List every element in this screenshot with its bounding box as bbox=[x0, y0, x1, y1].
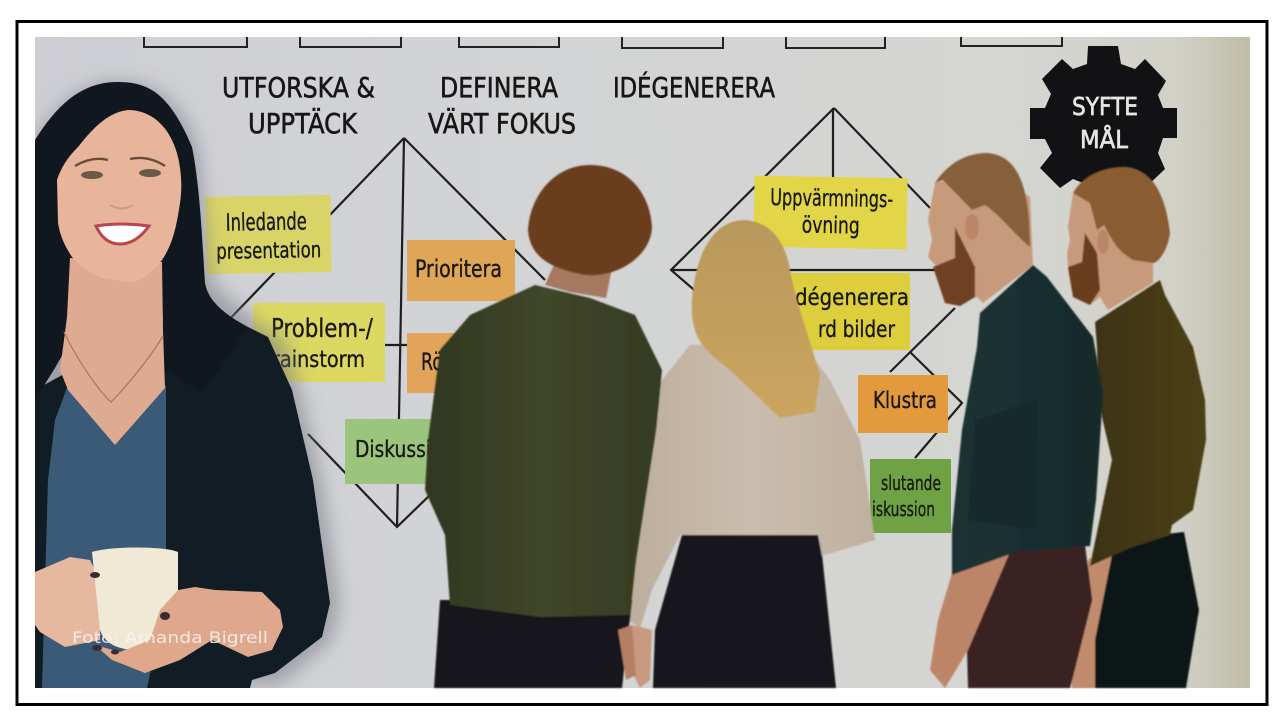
smile bbox=[96, 224, 149, 244]
portrait shadow bbox=[35, 82, 340, 685]
person: woman with blonde hair and beige sweater bbox=[628, 220, 875, 688]
top empty boxes bbox=[144, 37, 1062, 48]
blazer bbox=[35, 320, 330, 688]
eyes and brows bbox=[75, 158, 165, 179]
nose shading bbox=[110, 205, 133, 208]
sticky note: prioritera bbox=[407, 240, 515, 301]
face bbox=[57, 110, 181, 282]
icon: gear syfte mål: SYFTE bbox=[1072, 92, 1138, 121]
icon: gear syfte mål: MÅL bbox=[1080, 125, 1128, 154]
heading: definera vårt fokus: DEFINERA bbox=[440, 71, 558, 104]
sticky note: klustra: Klustra bbox=[873, 388, 937, 414]
neck and chest bbox=[60, 258, 165, 445]
sticky note: inledande presentation: Inledande bbox=[226, 207, 307, 237]
necklace bbox=[64, 332, 163, 402]
sticky note: idégenerera med bilder: dégenerera bbox=[795, 285, 909, 311]
sticky note: uppvärmningsövning bbox=[753, 176, 908, 249]
sticky note: uppvärmningsövning: Uppvärmnings- bbox=[770, 185, 893, 213]
hair bbox=[35, 82, 248, 400]
sticky note: uppvärmningsövning: övning bbox=[802, 213, 860, 240]
sticky note: klustra bbox=[858, 375, 948, 433]
right diamond diagram bbox=[671, 108, 962, 458]
right hand and forearm bbox=[95, 587, 283, 673]
sticky note: diskussion bbox=[345, 419, 435, 484]
sticky note: idégenerera med bilder bbox=[788, 273, 910, 350]
sticky note: avslutande diskussion bbox=[870, 459, 951, 533]
sticky note: problem brainstorm bbox=[253, 303, 385, 382]
icon: gear syfte mål bbox=[1030, 46, 1177, 205]
person: man in green sweater bbox=[425, 165, 662, 688]
blouse bbox=[42, 385, 166, 688]
sticky note: problem brainstorm: rainstorm bbox=[272, 347, 365, 373]
heading: definera vårt fokus bbox=[428, 71, 576, 140]
portrait: smiling woman with coffee mug bbox=[35, 82, 330, 688]
mug bbox=[92, 548, 178, 650]
left hand bbox=[35, 557, 100, 647]
left diamond diagram bbox=[222, 138, 545, 527]
person: man in olive shirt, far right bbox=[1067, 167, 1206, 688]
person: man in dark teal shirt bbox=[928, 153, 1103, 688]
sticky note: inledande presentation bbox=[205, 195, 332, 274]
sticky note: rö: Rö bbox=[421, 348, 443, 376]
sticky note: diskussion: Diskussi bbox=[355, 437, 431, 463]
heading: idégenerera: IDÉGENERERA bbox=[613, 70, 775, 104]
sticky note: idégenerera med bilder: rd bilder bbox=[818, 317, 895, 343]
nails bbox=[90, 572, 170, 654]
heading: utforska och upptäck bbox=[222, 71, 375, 140]
heading: definera vårt fokus: VÄRT FOKUS bbox=[428, 107, 576, 140]
sticky note: avslutande diskussion: slutande bbox=[881, 471, 941, 495]
photo credit: Foto: Amanda Bigrell bbox=[72, 628, 268, 647]
sticky note: inledande presentation: presentation bbox=[216, 238, 322, 265]
sticky note: problem brainstorm: Problem-/ bbox=[271, 314, 373, 344]
heading: utforska och upptäck: UTFORSKA & bbox=[222, 71, 375, 104]
sticky note: prioritera: Prioritera bbox=[415, 255, 502, 283]
sticky note: avslutande diskussion: iskussion bbox=[872, 497, 935, 521]
heading: utforska och upptäck: UPPTÄCK bbox=[248, 107, 358, 140]
sticky note: rö bbox=[407, 333, 459, 393]
